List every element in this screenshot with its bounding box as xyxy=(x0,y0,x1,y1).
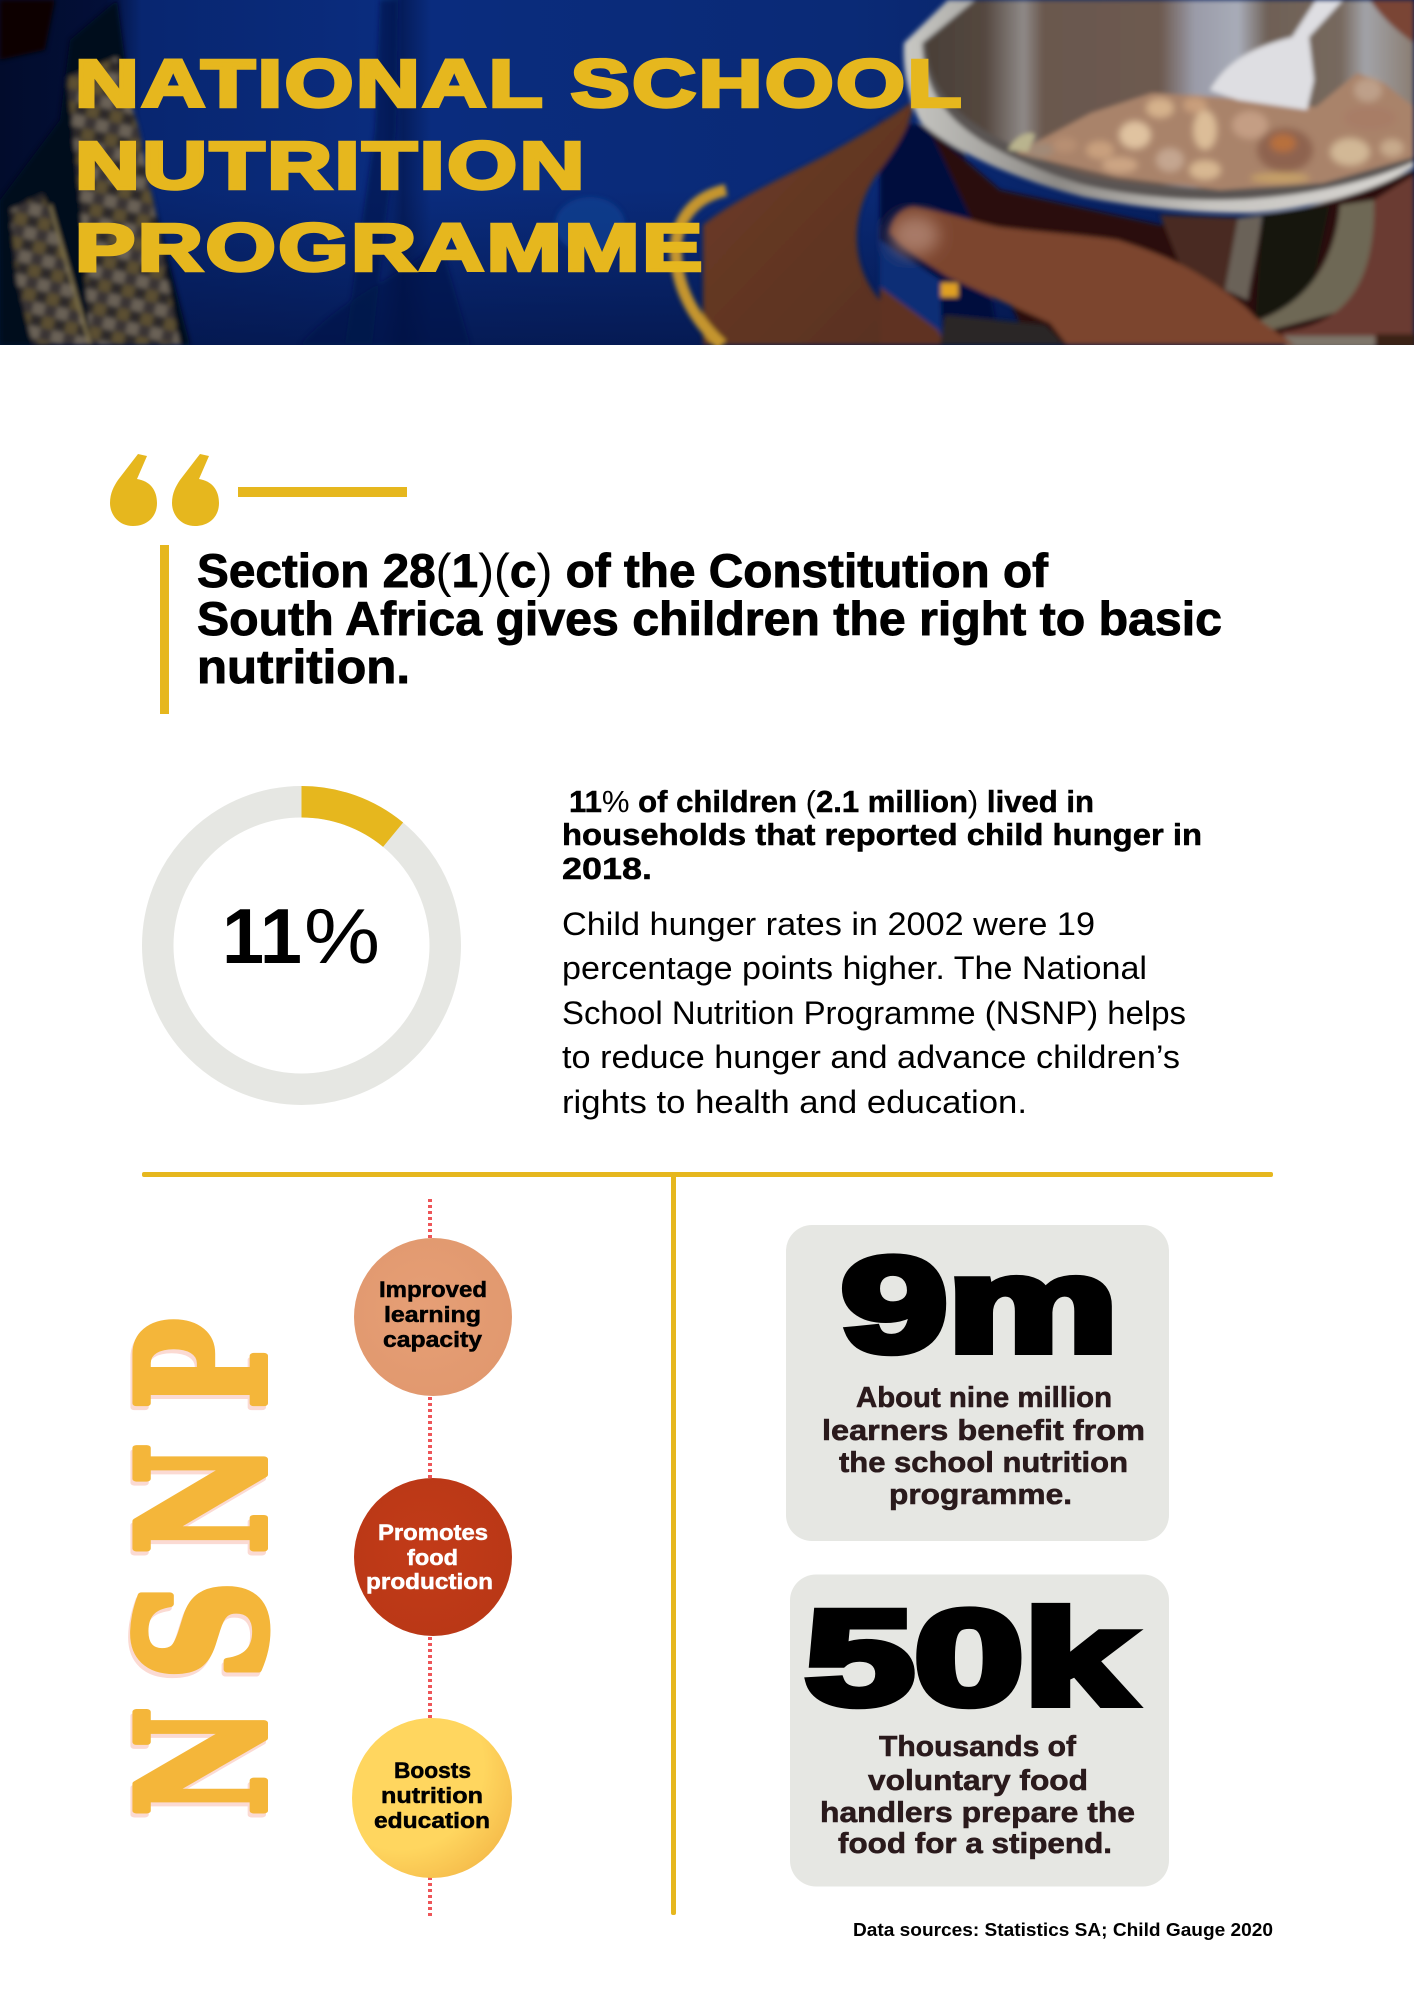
top right finger xyxy=(1370,0,1414,43)
benefit circle: boosts nutrition education: Boosts xyxy=(394,1758,471,1783)
stat description: voluntary food xyxy=(868,1765,1088,1797)
thumb xyxy=(890,207,1295,345)
child hunger body text: School Nutrition Programme (NSNP) helps xyxy=(562,995,1186,1031)
icon: opening quotation marks xyxy=(110,454,407,526)
bowl rim and interior xyxy=(904,0,1414,213)
stat description: handlers prepare the xyxy=(820,1797,1135,1829)
stat description xyxy=(820,1731,1135,1860)
stat description: learners benefit from xyxy=(822,1415,1145,1447)
benefit circle: boosts nutrition education: education xyxy=(374,1808,490,1833)
title: NATIONAL SCHOOL xyxy=(75,46,964,122)
stat description: About nine million xyxy=(856,1382,1112,1414)
stat description: Thousands of xyxy=(879,1731,1076,1763)
vertical NSNP lettering: N xyxy=(99,1711,304,1820)
stat description: food for a stipend. xyxy=(838,1828,1112,1860)
benefit circle: improved learning capacity xyxy=(354,1238,512,1396)
bracelet xyxy=(676,190,726,345)
data sources note: Data sources: Statistics SA; Child Gauge 2020 xyxy=(853,1920,1273,1940)
benefit circle: improved learning capacity: capacity xyxy=(383,1327,483,1352)
vertical NSNP lettering: S xyxy=(99,1585,304,1684)
child hunger body text: to reduce hunger and advance children’s xyxy=(562,1039,1180,1075)
title: NUTRITION xyxy=(75,128,587,204)
benefit circle: promotes food production xyxy=(354,1478,512,1636)
child hunger body text: Child hunger rates in 2002 were 19 xyxy=(562,906,1095,942)
quote text: constitutional right: nutrition. xyxy=(197,640,410,693)
header photo: child holding a bowl of food xyxy=(0,0,1414,348)
quote text: constitutional right: South Africa gives children the right to basic xyxy=(197,592,1222,645)
benefit circle: boosts nutrition education: nutrition xyxy=(381,1783,483,1808)
vertical NSNP lettering: S xyxy=(101,1581,306,1680)
donut chart: 11% xyxy=(158,802,445,1089)
quote text: constitutional right: Section 28(1)(c) of the Constitution of xyxy=(197,544,1048,597)
child hunger heading: households that reported child hunger in xyxy=(562,817,1202,852)
title: PROGRAMME xyxy=(75,210,705,286)
donut value label xyxy=(222,892,380,980)
donut value label: % xyxy=(304,892,380,980)
quote text: constitutional right xyxy=(197,544,1222,693)
benefit circle: promotes food production: production xyxy=(366,1569,493,1594)
child hunger body text: percentage points higher. The National xyxy=(562,950,1147,986)
vertical NSNP lettering: P xyxy=(99,1323,304,1413)
quote accent bar xyxy=(160,545,169,714)
child hunger body text xyxy=(562,906,1186,1120)
child hunger heading: 11% of children (2.1 million) lived in xyxy=(569,784,1094,819)
benefit circle: boosts nutrition education xyxy=(352,1718,512,1878)
stat: 50k: 50k xyxy=(805,1584,1134,1733)
child hunger heading xyxy=(562,784,1202,886)
stat description: programme. xyxy=(889,1479,1072,1511)
vertical NSNP lettering: N xyxy=(101,1707,306,1816)
vertical NSNP lettering: P xyxy=(101,1319,306,1409)
vertical NSNP lettering xyxy=(99,1319,306,1820)
stat description xyxy=(822,1382,1145,1511)
panel: fifty thousand food handlers xyxy=(790,1574,1169,1886)
donut value label: 11 xyxy=(222,892,302,980)
title xyxy=(75,46,964,286)
vertical NSNP lettering: N xyxy=(99,1447,304,1558)
panel: nine million learners xyxy=(786,1225,1169,1541)
benefit circle: improved learning capacity: learning xyxy=(384,1302,481,1327)
stat description: the school nutrition xyxy=(839,1447,1128,1479)
child hunger heading: 2018. xyxy=(562,851,652,886)
spoon xyxy=(1210,0,1343,110)
stat: 9m: 9m xyxy=(841,1231,1118,1380)
food xyxy=(1016,73,1414,190)
benefit circle: promotes food production: food xyxy=(407,1545,458,1570)
bowl exterior xyxy=(930,130,1414,345)
vertical NSNP lettering: N xyxy=(101,1443,306,1554)
child hunger body text: rights to health and education. xyxy=(562,1084,1027,1120)
benefit circle: improved learning capacity: Improved xyxy=(379,1277,487,1302)
benefit circle: promotes food production: Promotes xyxy=(378,1520,488,1545)
palm and wrist xyxy=(703,100,938,345)
